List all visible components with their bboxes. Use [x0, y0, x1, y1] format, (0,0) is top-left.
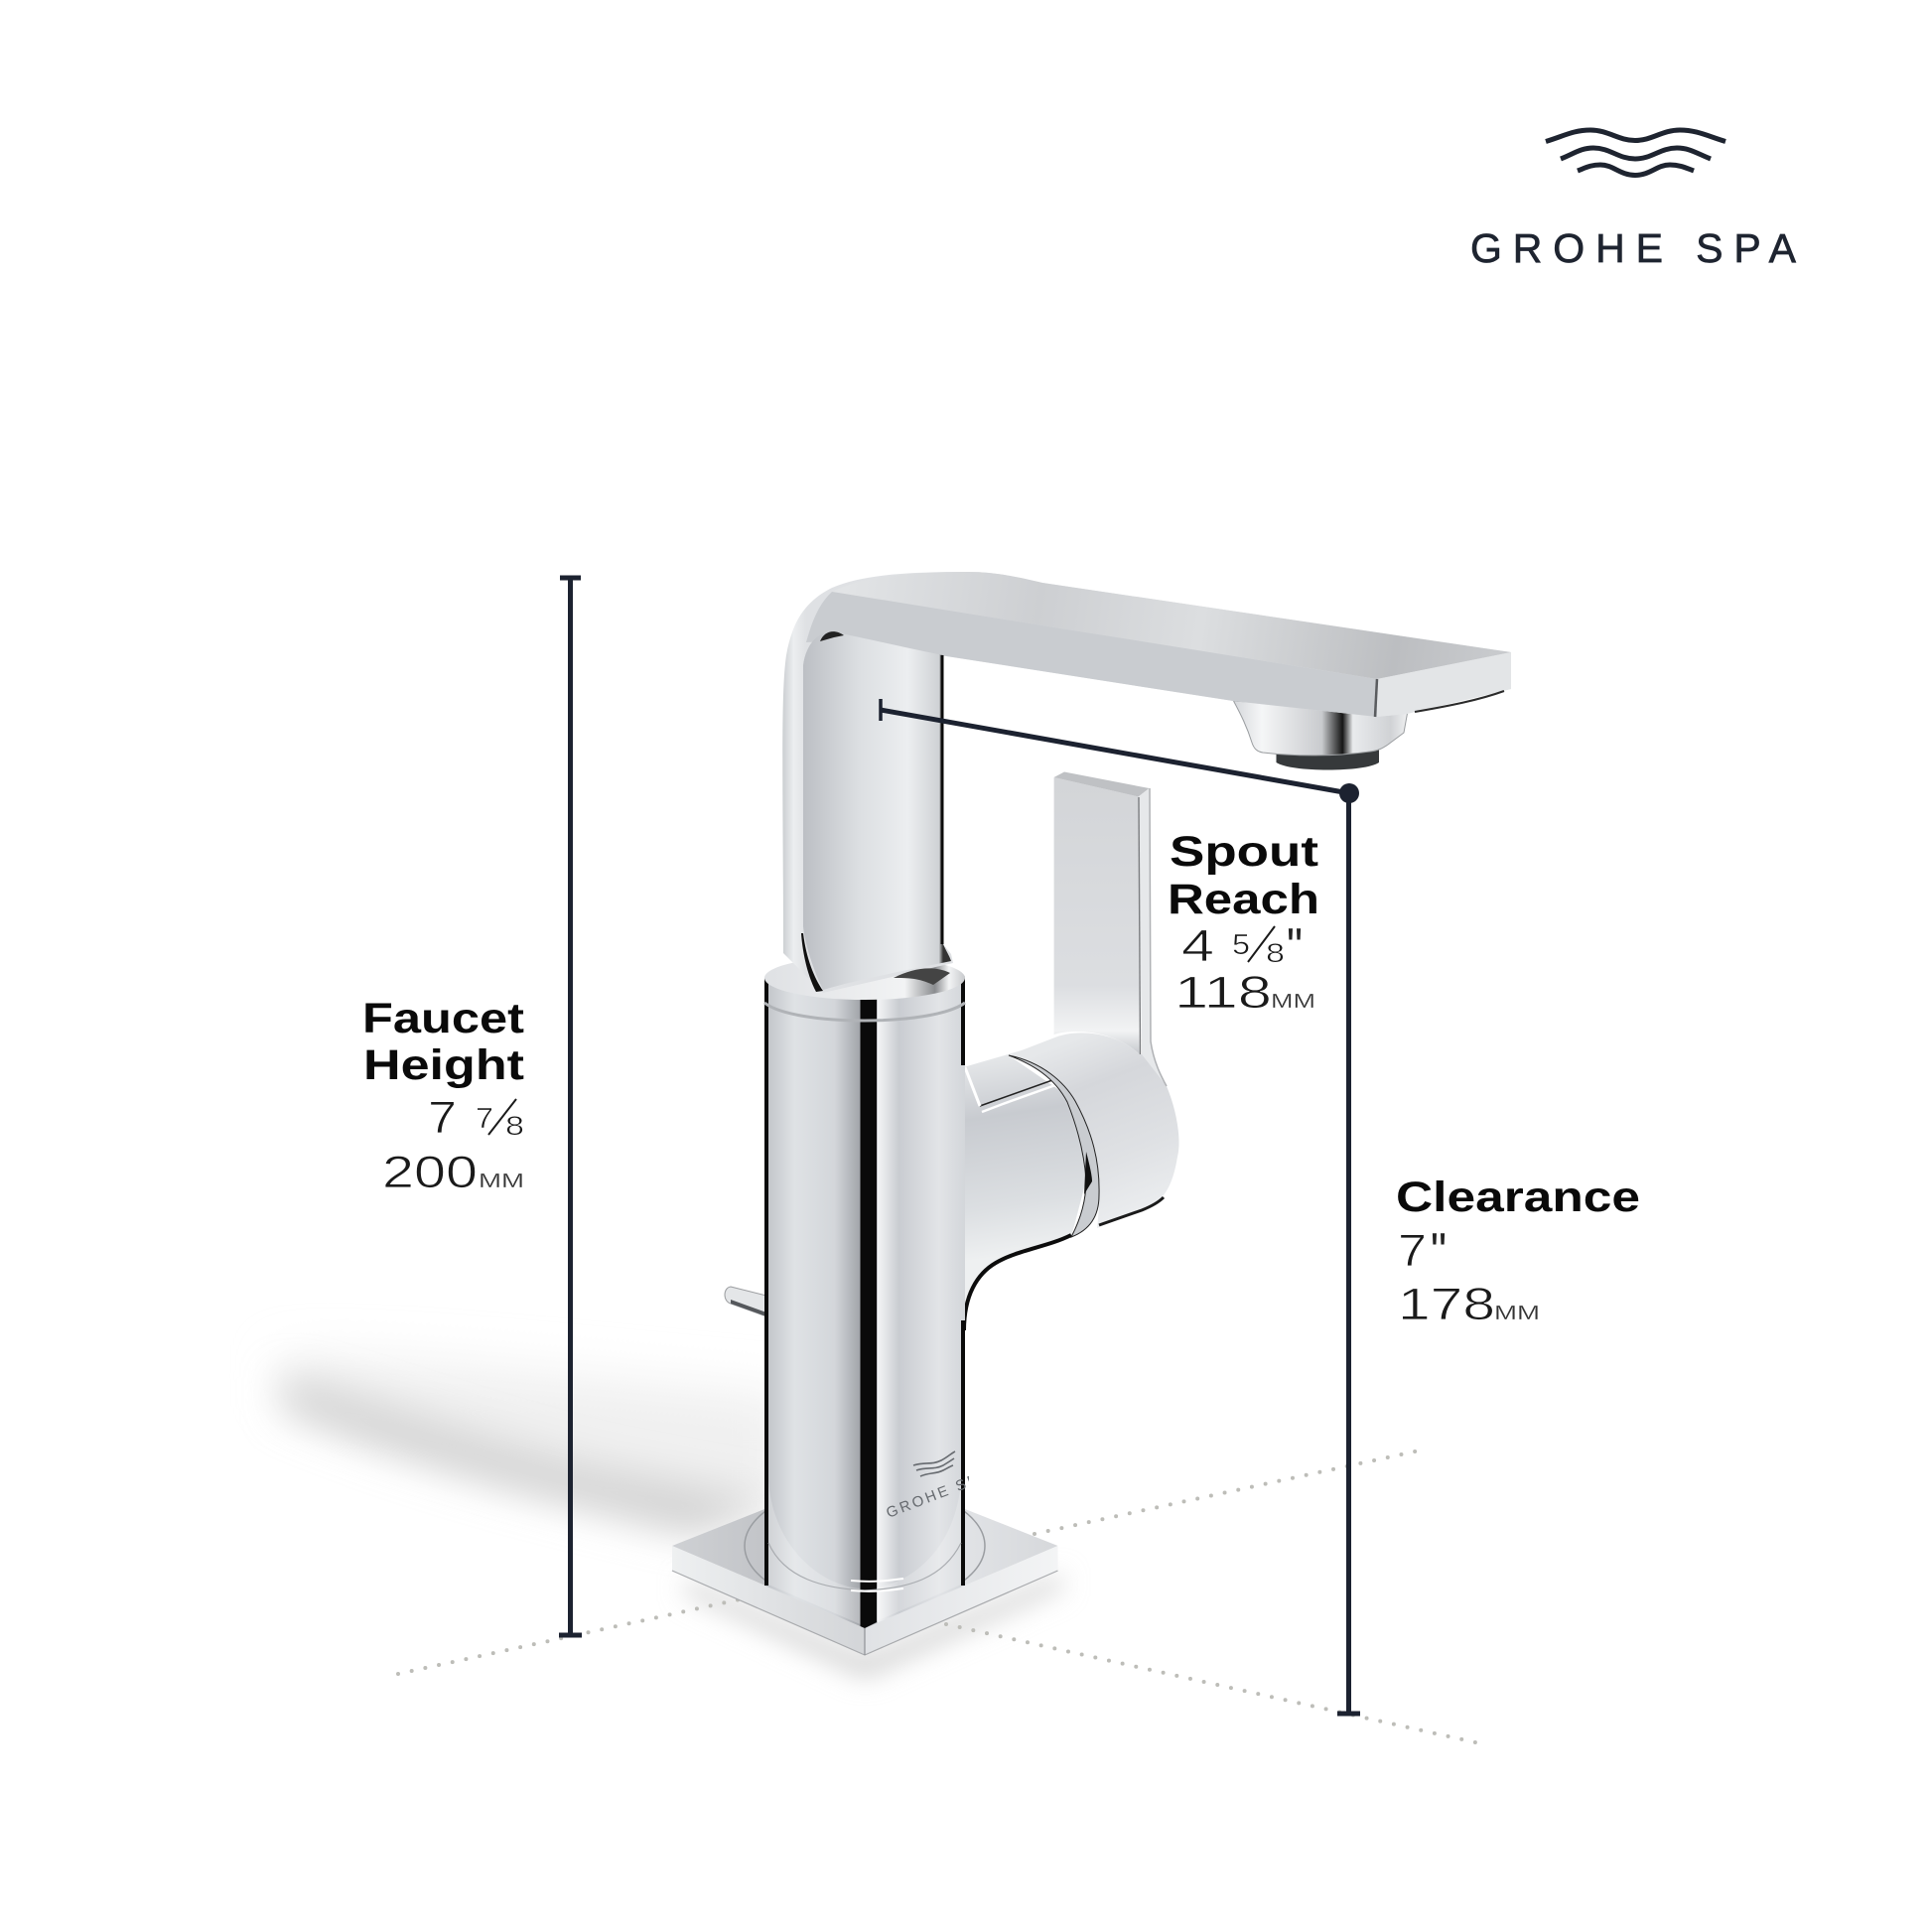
label: clearance [1396, 1173, 1640, 1329]
pop-up drain rod [725, 1287, 766, 1316]
label: faucet height: 8 [505, 1111, 524, 1141]
icon: water waves [1546, 130, 1725, 175]
label: clearance: " [1431, 1223, 1447, 1281]
label: faucet height: 200 [382, 1147, 478, 1197]
label: faucet height: MM [479, 1171, 524, 1192]
label: spout reach: 5 [1232, 929, 1250, 961]
faucet body cylinder [764, 976, 965, 1628]
dimension: spout reach line [881, 699, 1359, 803]
spout neck into lever [953, 1041, 1086, 1325]
engraved wordmark: GROHE SPA [884, 1466, 994, 1522]
label: spout reach: Reach [1168, 876, 1319, 923]
label: spout reach: Spout [1170, 828, 1318, 876]
label: spout reach: 8 [1266, 938, 1285, 968]
neck lower black edge [964, 1235, 1071, 1330]
label: faucet height: Faucet [362, 995, 524, 1042]
collar [764, 956, 965, 1021]
dimension: clearance line [1337, 793, 1360, 1714]
lever blade [1054, 772, 1167, 1086]
label: faucet height [362, 995, 524, 1197]
faucet illustration [672, 572, 1511, 1655]
cast shadow of faucet [283, 1359, 1062, 1678]
label: clearance: MM [1494, 1303, 1540, 1324]
base plate [672, 1469, 1058, 1655]
engraved waves [913, 1451, 955, 1476]
logo wordmark: GROHE SPA [1470, 225, 1797, 271]
lever black glint [1084, 1152, 1092, 1194]
body base rings [768, 1543, 961, 1591]
dotted floor guide lines [398, 1450, 1475, 1742]
label: spout reach: MM [1271, 991, 1315, 1013]
lever ring [1009, 1055, 1099, 1237]
neck crease line [965, 1059, 1111, 1112]
label: clearance: Clearance [1396, 1173, 1640, 1221]
cylinder base reflection [768, 1479, 961, 1626]
lever hub [1009, 1033, 1179, 1228]
cylinder black edges [764, 978, 965, 1628]
label: faucet height: 7 [428, 1092, 457, 1143]
label: spout reach: 118 [1174, 967, 1272, 1018]
label: spout reach [1168, 828, 1319, 1018]
label: spout reach: 4 [1181, 920, 1214, 971]
label: faucet height: Height [363, 1041, 524, 1089]
engraved logo on body [887, 1450, 969, 1517]
label: faucet height: 7 [476, 1103, 493, 1135]
logo: Grohe Spa [1470, 130, 1797, 271]
hub lower dark edge [1099, 1197, 1164, 1225]
spout aerator [1233, 701, 1408, 770]
label: clearance: 7 [1398, 1225, 1427, 1276]
dimension: faucet height line [559, 576, 582, 1637]
label: spout reach: " [1287, 918, 1303, 976]
label: clearance: 178 [1398, 1279, 1495, 1329]
spout [782, 572, 1511, 993]
riser column [801, 631, 951, 992]
